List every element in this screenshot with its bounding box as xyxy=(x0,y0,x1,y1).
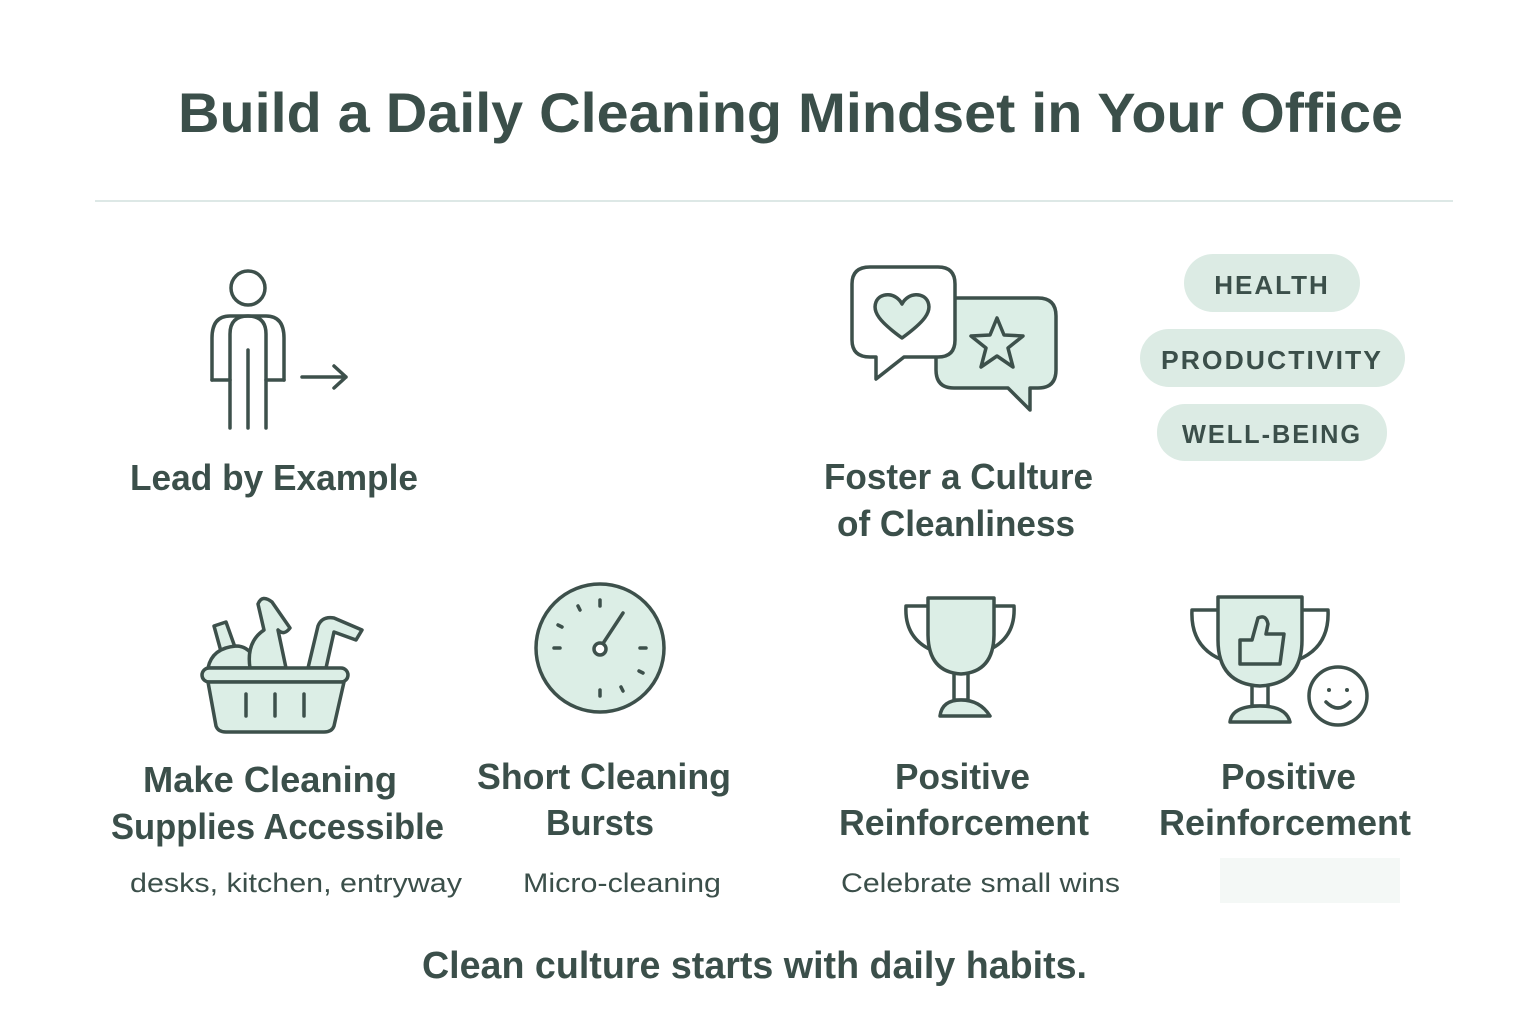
pills: values xyxy=(1140,254,1405,461)
footer tagline: Clean culture starts with daily habits. xyxy=(422,945,1087,987)
text: Bursts xyxy=(546,802,654,843)
heading: short cleaning bursts: Short Cleaning xyxy=(477,756,731,797)
icon: clock xyxy=(536,584,664,712)
icon: trophy xyxy=(906,598,1014,716)
subtext: locations: desks, kitchen, entryway xyxy=(130,868,463,898)
text: Reinforcement xyxy=(839,802,1089,843)
pills: values: HEALTH xyxy=(1214,270,1330,300)
title: Build a Daily Cleaning Mindset in Your Office xyxy=(178,81,1403,144)
subtext: celebrate: Celebrate small wins xyxy=(841,868,1120,898)
text: Supplies Accessible xyxy=(111,806,444,847)
heading: positive reinforcement 2: Positive xyxy=(1221,756,1356,797)
text: Reinforcement xyxy=(1159,802,1411,843)
pills: values: WELL-BEING xyxy=(1182,419,1362,449)
icon: basket of supplies xyxy=(202,598,362,732)
heading: lead by example: Lead by Example xyxy=(130,457,418,498)
subtext: micro-cleaning: Micro-cleaning xyxy=(523,868,721,898)
icon: trophy with thumbs up and smiley xyxy=(1192,597,1367,725)
text: of Cleanliness xyxy=(837,503,1075,544)
heading: make cleaning supplies accessible: Make Cleaning xyxy=(143,759,397,800)
pills: values: PRODUCTIVITY xyxy=(1161,345,1383,375)
icon: speech bubbles xyxy=(852,267,1056,410)
heading: foster a culture: Foster a Culture xyxy=(824,456,1093,497)
icon: person with arrow xyxy=(212,271,346,428)
heading: positive reinforcement 1: Positive xyxy=(895,756,1030,797)
